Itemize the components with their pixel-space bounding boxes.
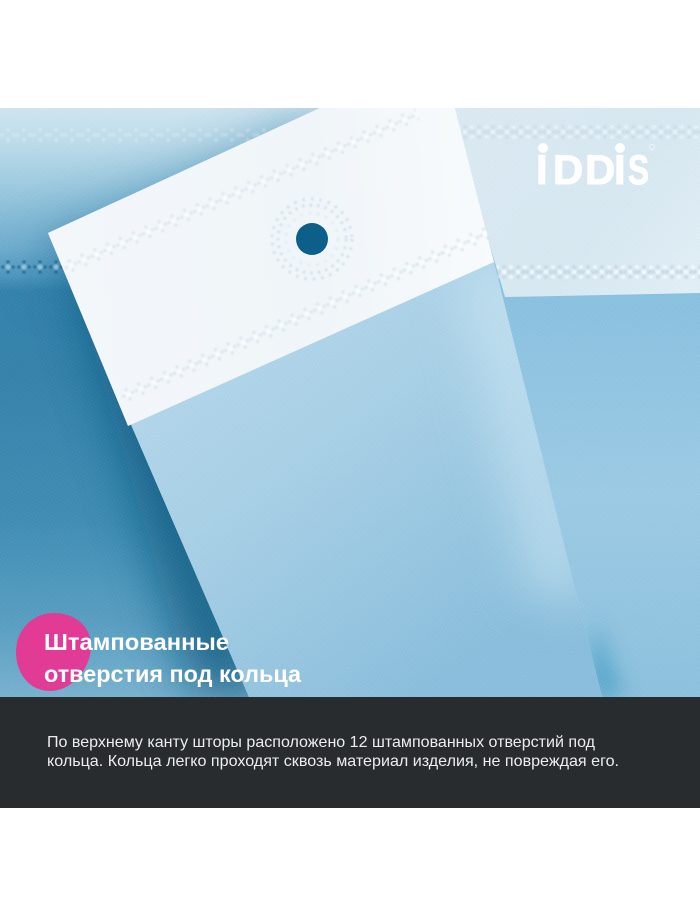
description text: кольца. Кольца легко проходят сквозь материал изделия, не повреждая его. <box>47 753 619 770</box>
stitched band lower <box>118 224 492 405</box>
heading: Штампованные <box>44 629 229 655</box>
panel: white reinforced hem <box>48 108 494 426</box>
pink blob accent <box>16 613 91 691</box>
heading: отверстия под кольца <box>44 661 301 687</box>
description text: По верхнему канту шторы расположено 12 штампованных отверстий под <box>47 734 596 751</box>
logo: IDDIS <box>538 143 655 185</box>
logo: IDDIS: IDDI <box>536 146 626 193</box>
panel: background curtain left <box>0 108 330 697</box>
panel: curtain tag front layer <box>40 108 610 697</box>
logo: IDDIS: S <box>628 146 649 193</box>
panel: dark description bar <box>0 697 700 808</box>
stitched band upper <box>61 106 421 276</box>
punched hole with ring of dots <box>272 199 352 279</box>
panel: background curtain right <box>450 108 700 697</box>
photo: shower curtain close-up <box>0 106 700 697</box>
